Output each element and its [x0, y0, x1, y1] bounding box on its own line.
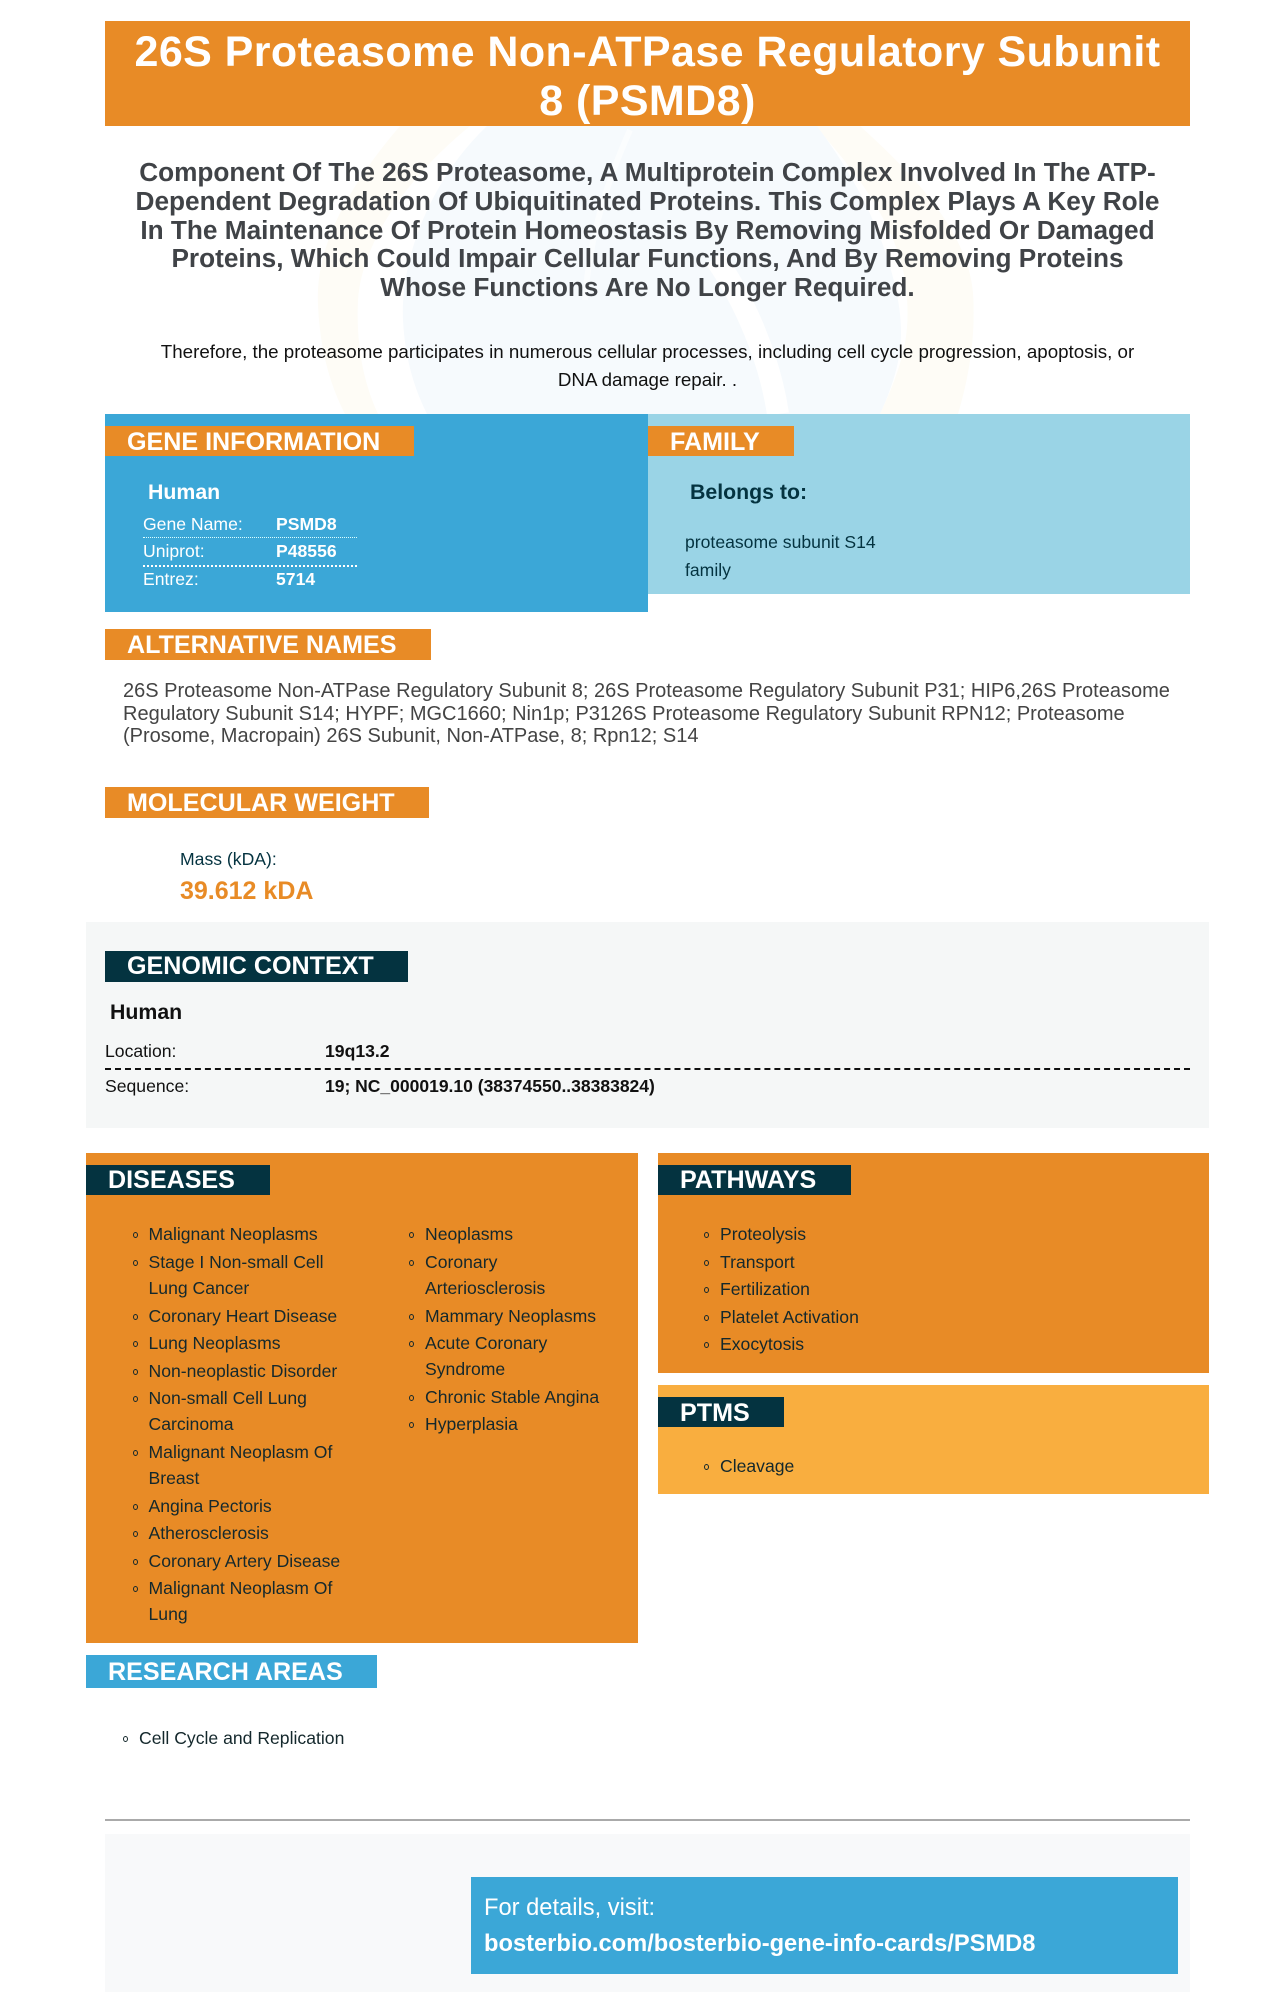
mass value: 39.612 kDA [180, 877, 313, 905]
callout url: bosterbio.com/bosterbio-gene-info-cards/PSMD8 [484, 1931, 1035, 1957]
gene info table: P48556 [276, 541, 337, 561]
disease list column 1: Breast [148, 1468, 199, 1488]
family text: family [685, 560, 731, 580]
lead description: In The Maintenance Of Protein Homeostasis By Removing Misfolded Or Damaged [140, 215, 1155, 245]
genomic table: 19q13.2 [325, 1041, 390, 1061]
research area list: Cell Cycle and Replication [139, 1728, 344, 1748]
gene info table [143, 514, 357, 589]
pathway list: Proteolysis [720, 1224, 806, 1244]
panel: gene information [105, 414, 648, 612]
body description: DNA damage repair. . [558, 369, 737, 390]
disease list column 2 [409, 1224, 600, 1434]
heading: family: FAMILY [670, 428, 760, 456]
panel: pathways [658, 1153, 1209, 1373]
disease list column 2: Chronic Stable Angina [425, 1387, 599, 1407]
watermark logo [318, 126, 974, 414]
heading: alternative names: ALTERNATIVE NAMES [127, 631, 397, 659]
gene info table: Entrez: [143, 569, 199, 589]
disease list column 1: Lung Neoplasms [148, 1333, 281, 1353]
disease list column 1: Non-small Cell Lung [148, 1388, 307, 1408]
species label: Human [110, 1000, 182, 1024]
disease list column 1: Malignant Neoplasm Of [148, 1442, 332, 1462]
panel: footer [105, 1834, 1190, 1992]
heading: research areas [86, 1655, 377, 1688]
genomic table: Location: [105, 1041, 176, 1061]
heading: ptms: PTMS [680, 1399, 750, 1427]
disease list column 1: Malignant Neoplasm Of [148, 1578, 332, 1598]
disease list column 1: Coronary Artery Disease [148, 1551, 340, 1571]
species label: Human [148, 480, 220, 504]
pathway list: Platelet Activation [720, 1307, 859, 1327]
gene info table: Gene Name: [143, 514, 243, 534]
disease list column 2: Coronary [425, 1252, 497, 1272]
alternative names text: 26S Proteasome Non-ATPase Regulatory Subunit 8; 26S Proteasome Regulatory Subunit P31; HIP6,26S Proteasome [123, 680, 1170, 702]
pathway list: Fertilization [720, 1279, 810, 1299]
disease list column 1: Non-neoplastic Disorder [148, 1361, 337, 1381]
disease list column 1: Lung Cancer [148, 1278, 249, 1298]
panel: genomic context [86, 922, 1209, 1128]
heading: family [648, 426, 794, 456]
disease list column 1: Lung [148, 1604, 188, 1624]
heading: molecular weight: MOLECULAR WEIGHT [127, 789, 395, 817]
disease list column 1: Atherosclerosis [148, 1523, 269, 1543]
disease list column 2: Neoplasms [425, 1224, 513, 1244]
lead description: Component Of The 26S Proteasome, A Multiprotein Complex Involved In The ATP- [139, 157, 1156, 187]
disease list column 1: Angina Pectoris [148, 1496, 272, 1516]
heading: ptms [658, 1397, 784, 1427]
lead description [136, 157, 1159, 302]
callout label: For details, visit: [484, 1895, 655, 1921]
title: 26S Proteasome Non-ATPase Regulatory Subunit [134, 28, 1160, 76]
body description: Therefore, the proteasome participates in numerous cellular processes, including cell cycle progression, apoptosis, or [161, 341, 1134, 362]
disease list column 2: Syndrome [425, 1359, 505, 1379]
title [105, 21, 1190, 126]
panel: ptms [658, 1385, 1209, 1494]
gene info table: 5714 [276, 569, 315, 589]
alternative names text: Regulatory Subunit S14; HYPF; MGC1660; Nin1p; P3126S Proteasome Regulatory Subunit RPN12; Proteasome [123, 702, 1125, 724]
disease list column 1: Stage I Non-small Cell [148, 1252, 324, 1272]
lead description: Whose Functions Are No Longer Required. [380, 272, 915, 302]
panel: diseases [86, 1153, 638, 1643]
disease list column 2: Arteriosclerosis [425, 1278, 545, 1298]
lead description: Dependent Degradation Of Ubiquitinated Proteins. This Complex Plays A Key Role [136, 186, 1159, 216]
disease list column 2: Hyperplasia [425, 1414, 518, 1434]
heading: research areas: RESEARCH AREAS [108, 1658, 343, 1686]
title: 8 (PSMD8) [539, 77, 756, 125]
callout: details link [471, 1877, 1178, 1974]
ptm list: Cleavage [720, 1456, 794, 1476]
disease list column 2: Acute Coronary [425, 1333, 547, 1353]
alternative names text: (Prosome, Macropain) 26S Subunit, Non-ATPase, 8; Rpn12; S14 [123, 725, 698, 747]
heading: diseases: DISEASES [108, 1166, 235, 1194]
heading: genomic context: GENOMIC CONTEXT [127, 952, 374, 980]
heading: pathways: PATHWAYS [680, 1166, 816, 1194]
gene info table: PSMD8 [276, 514, 337, 534]
disease list column 1: Coronary Heart Disease [148, 1306, 337, 1326]
genomic table: Sequence: [105, 1076, 189, 1096]
body description [161, 341, 1134, 390]
disease list column 1 [133, 1224, 340, 1624]
disease list column 1: Malignant Neoplasms [148, 1224, 318, 1244]
disease list column 2: Mammary Neoplasms [425, 1306, 596, 1326]
pathway list: Exocytosis [720, 1334, 804, 1354]
pathway list [704, 1224, 859, 1354]
genomic table [105, 1041, 1190, 1096]
panel: family [648, 414, 1190, 594]
family text [685, 532, 876, 580]
belongs to label: Belongs to: [690, 480, 807, 504]
heading: diseases [86, 1165, 270, 1195]
pathway list: Transport [720, 1252, 795, 1272]
heading: pathways [658, 1165, 851, 1195]
gene info table: Uniprot: [143, 541, 205, 561]
family text: proteasome subunit S14 [685, 532, 876, 552]
disease list column 1: Carcinoma [148, 1414, 234, 1434]
lead description: Proteins, Which Could Impair Cellular Functions, And By Removing Proteins [171, 243, 1124, 273]
heading: gene information: GENE INFORMATION [127, 428, 380, 456]
genomic table: 19; NC_000019.10 (38374550..38383824) [325, 1076, 655, 1096]
alternative names text [123, 680, 1170, 747]
mass label: Mass (kDA): [180, 849, 277, 869]
